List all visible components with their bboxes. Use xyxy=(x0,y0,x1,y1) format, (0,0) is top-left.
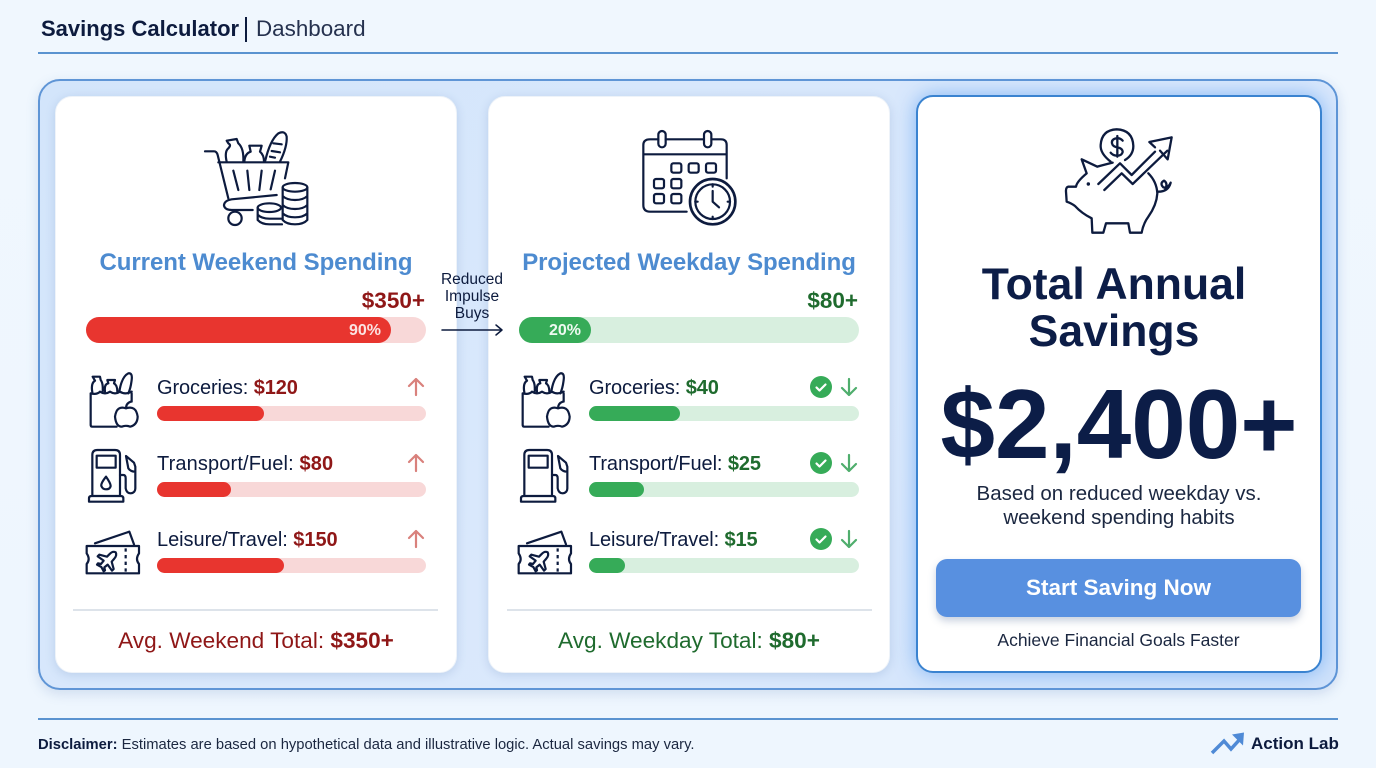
icon: travel ticket xyxy=(518,530,572,574)
label: Transport/Fuel: $25 xyxy=(589,453,761,475)
bar xyxy=(157,558,426,573)
label: Leisure/Travel: $15 xyxy=(589,529,758,551)
tagline: Achieve Financial Goals Faster xyxy=(997,630,1240,650)
panel: current weekend spending xyxy=(55,96,457,673)
icon: calendar with clock xyxy=(642,130,737,226)
heading: total annual savings xyxy=(982,260,1246,356)
big number: $2,400+ xyxy=(940,369,1297,479)
button: Start Saving Now xyxy=(1026,575,1211,600)
heading: projected weekday spending: Projected Weekday Spending xyxy=(522,249,856,276)
down arrow xyxy=(840,378,858,396)
heading: total annual savings: Total Annual xyxy=(982,260,1246,309)
progress bar: 20%: 20% xyxy=(549,322,581,339)
check badge xyxy=(810,452,832,474)
footer total: weekday: Avg. Weekday Total: $80+ xyxy=(558,628,820,653)
bar xyxy=(589,558,859,573)
header xyxy=(38,16,1338,54)
label: Transport/Fuel: $80 xyxy=(157,453,333,475)
progress bar: 20% xyxy=(519,317,859,343)
description: weekend spending habits xyxy=(1003,506,1235,529)
label: Groceries: $120 xyxy=(157,377,298,399)
row: leisure current xyxy=(86,529,426,574)
row: transport projected xyxy=(520,448,859,503)
brand name: Action Lab xyxy=(1251,734,1339,753)
progress bar: 90% xyxy=(86,317,426,343)
panel: total annual savings xyxy=(916,95,1322,673)
callout: reduced impulse buys: Impulse xyxy=(445,288,499,305)
check badge xyxy=(810,376,832,398)
label: Leisure/Travel: $150 xyxy=(157,529,338,551)
icon: piggy bank with arrow xyxy=(1064,128,1173,234)
callout: reduced impulse buys xyxy=(441,271,503,336)
row: groceries projected xyxy=(522,372,859,428)
icon: grocery bag xyxy=(522,372,571,428)
description: Based on reduced weekday vs. xyxy=(977,482,1261,505)
bar xyxy=(589,482,859,497)
icon: grocery bag xyxy=(90,372,139,428)
icon: travel ticket xyxy=(86,530,140,574)
heading: total annual savings: Savings xyxy=(1029,307,1199,356)
total value: $80+: $80+ xyxy=(807,288,858,313)
down arrow xyxy=(840,454,858,472)
callout: reduced impulse buys: Buys xyxy=(455,305,489,322)
description xyxy=(977,482,1261,529)
main panel xyxy=(38,79,1338,690)
subtitle: Dashboard xyxy=(256,16,366,41)
callout: reduced impulse buys: Reduced xyxy=(441,271,503,288)
icon: shopping cart with coins xyxy=(204,131,308,226)
label: Groceries: $40 xyxy=(589,377,719,399)
title: Savings Calculator xyxy=(41,16,239,41)
icon: rising arrow xyxy=(1210,732,1244,754)
button xyxy=(936,559,1301,617)
bar xyxy=(157,406,426,421)
down arrow xyxy=(840,530,858,548)
bar xyxy=(157,482,426,497)
bar xyxy=(589,406,859,421)
disclaimer: Disclaimer: Estimates are based on hypothetical data and illustrative logic. Actual savings may vary. xyxy=(38,737,694,753)
row: leisure projected xyxy=(518,528,859,574)
footer total: weekend: Avg. Weekend Total: $350+ xyxy=(118,628,394,653)
progress bar: 90%: 90% xyxy=(349,322,381,339)
total value: $350+: $350+ xyxy=(362,288,425,313)
panel: projected weekday spending xyxy=(488,96,890,673)
row: groceries current xyxy=(90,372,426,428)
row: transport current xyxy=(88,448,426,503)
brand logo xyxy=(1210,732,1339,754)
heading: current weekend spending: Current Weekend Spending xyxy=(99,249,413,276)
up arrow xyxy=(408,378,424,396)
check badge xyxy=(810,528,832,550)
icon: fuel pump xyxy=(88,448,136,503)
icon: fuel pump xyxy=(520,448,568,503)
up arrow xyxy=(408,454,424,472)
arrow xyxy=(441,324,503,336)
up arrow xyxy=(408,530,424,548)
